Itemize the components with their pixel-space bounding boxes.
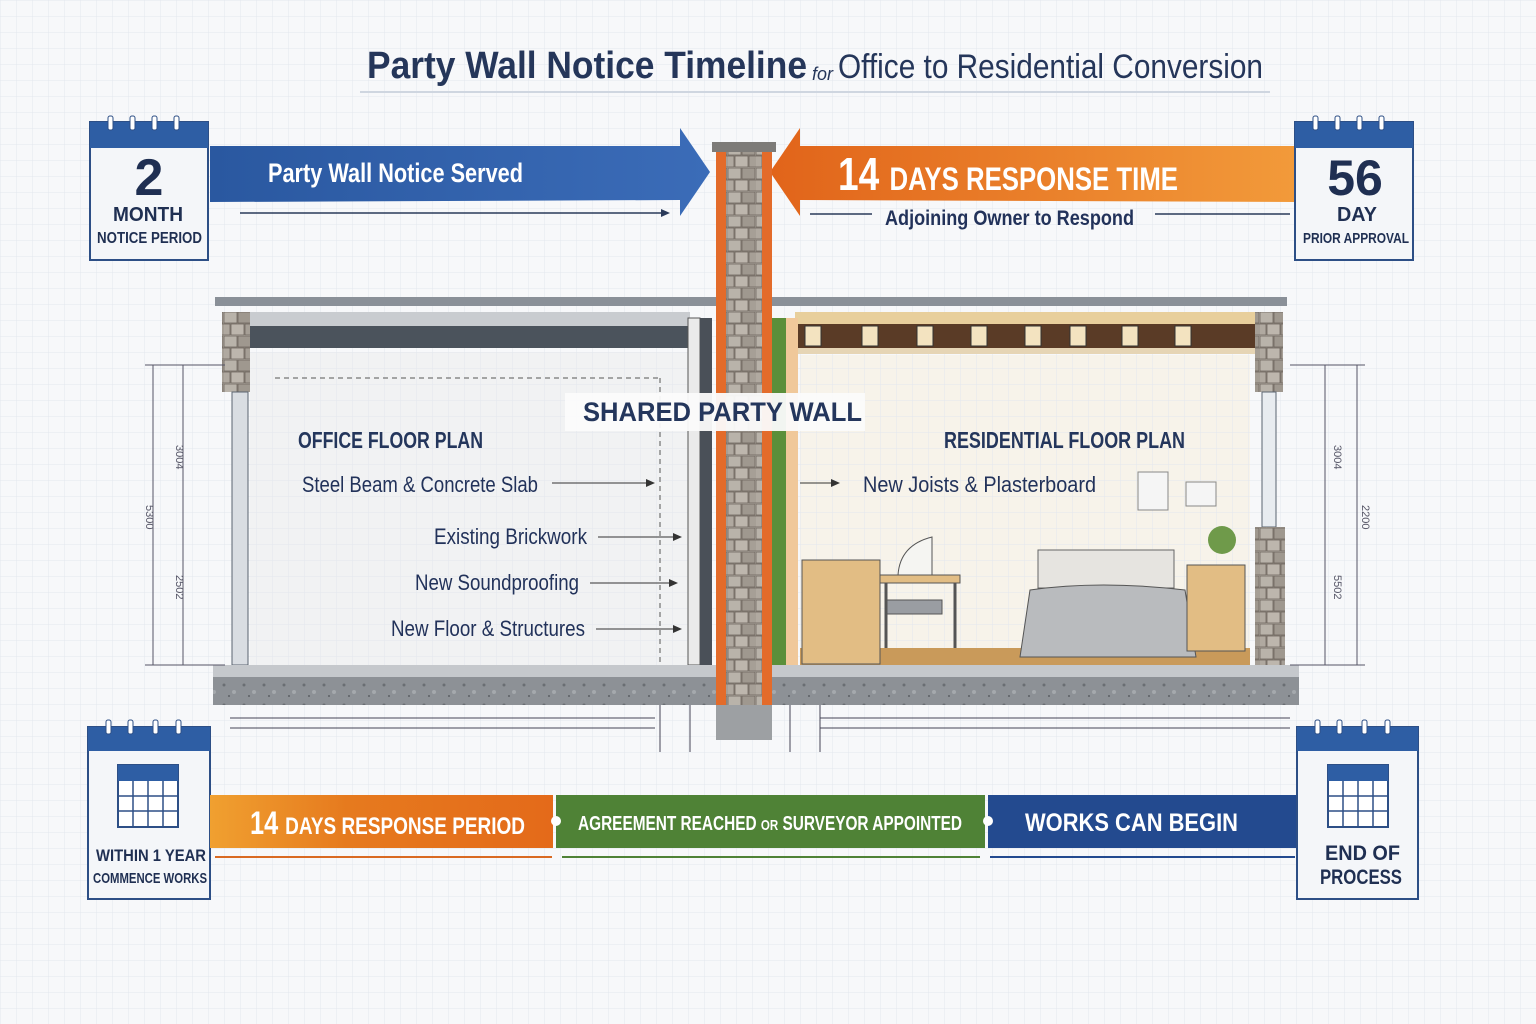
timeline bar: agreement reached or surveyor appointed [551,795,985,857]
label: shared party wall: SHARED PARTY WALL [583,397,862,427]
dimension lines: 5502 [1331,575,1343,599]
calendar: 2 month notice period: 2 [135,149,163,207]
calendar: within 1 year commence works: COMMENCE WORKS [93,870,207,887]
label: residential floor plan: RESIDENTIAL FLOOR PLAN [944,427,1185,453]
calendar: 2 month notice period [90,116,208,260]
calendar: 56 day prior approval: 56 [1327,150,1383,206]
calendar: end of process: END OF [1325,842,1400,865]
calendar: within 1 year commence works: WITHIN 1 YEAR [96,846,206,865]
shared party wall (brick chimney) [712,142,776,740]
calendar: 56 day prior approval: DAY [1337,204,1378,226]
annotation: new joists & plasterboard: New Joists & Plasterboard [863,472,1096,497]
dimension lines: 2502 [173,575,185,599]
dimension lines: 2200 [1359,505,1371,529]
office annotations: Steel Beam & Concrete Slab [302,472,538,497]
dimension lines: 3004 [1331,445,1343,469]
office annotations [302,472,682,641]
dimension lines [143,365,1371,665]
title: for [812,64,834,84]
timeline bar: agreement reached or surveyor appointed: AGREEMENT REACHED OR SURVEYOR APPOINTED [578,813,962,835]
arrow: 14 days response time [770,128,1295,230]
calendar: 2 month notice period: MONTH [113,204,183,226]
building cross-section [213,297,1299,752]
timeline bar: works can begin [983,795,1297,857]
title [360,45,1270,92]
dimension lines: 3004 [173,445,185,469]
timeline bar: 14 days response period: 14 DAYS RESPONSE PERIOD [250,805,525,841]
office annotations: Existing Brickwork [434,524,588,549]
office annotations: New Soundproofing [415,570,579,595]
calendar: end of process [1297,720,1418,899]
arrow: 14 days response time: Adjoining Owner to Respond [885,207,1134,230]
dimension lines: 5300 [143,505,155,529]
office annotations: New Floor & Structures [391,616,585,641]
label: office floor plan: OFFICE FLOOR PLAN [298,427,483,453]
title: Office to Residential Conversion [838,48,1263,86]
timeline bar: 14 days response period [210,795,553,857]
calendar: 56 day prior approval [1295,116,1413,260]
arrow: 14 days response time: 14 DAYS RESPONSE TIME [838,148,1178,200]
calendar: 2 month notice period: NOTICE PERIOD [97,230,202,247]
calendar: within 1 year commence works [88,720,210,899]
arrow: party wall notice served: Party Wall Notice Served [268,158,523,188]
arrow: party wall notice served [210,128,710,217]
calendar: end of process: PROCESS [1320,866,1402,889]
title: Party Wall Notice Timeline [367,45,807,87]
timeline bar: works can begin: WORKS CAN BEGIN [1025,809,1238,837]
calendar: 56 day prior approval: PRIOR APPROVAL [1303,230,1409,247]
